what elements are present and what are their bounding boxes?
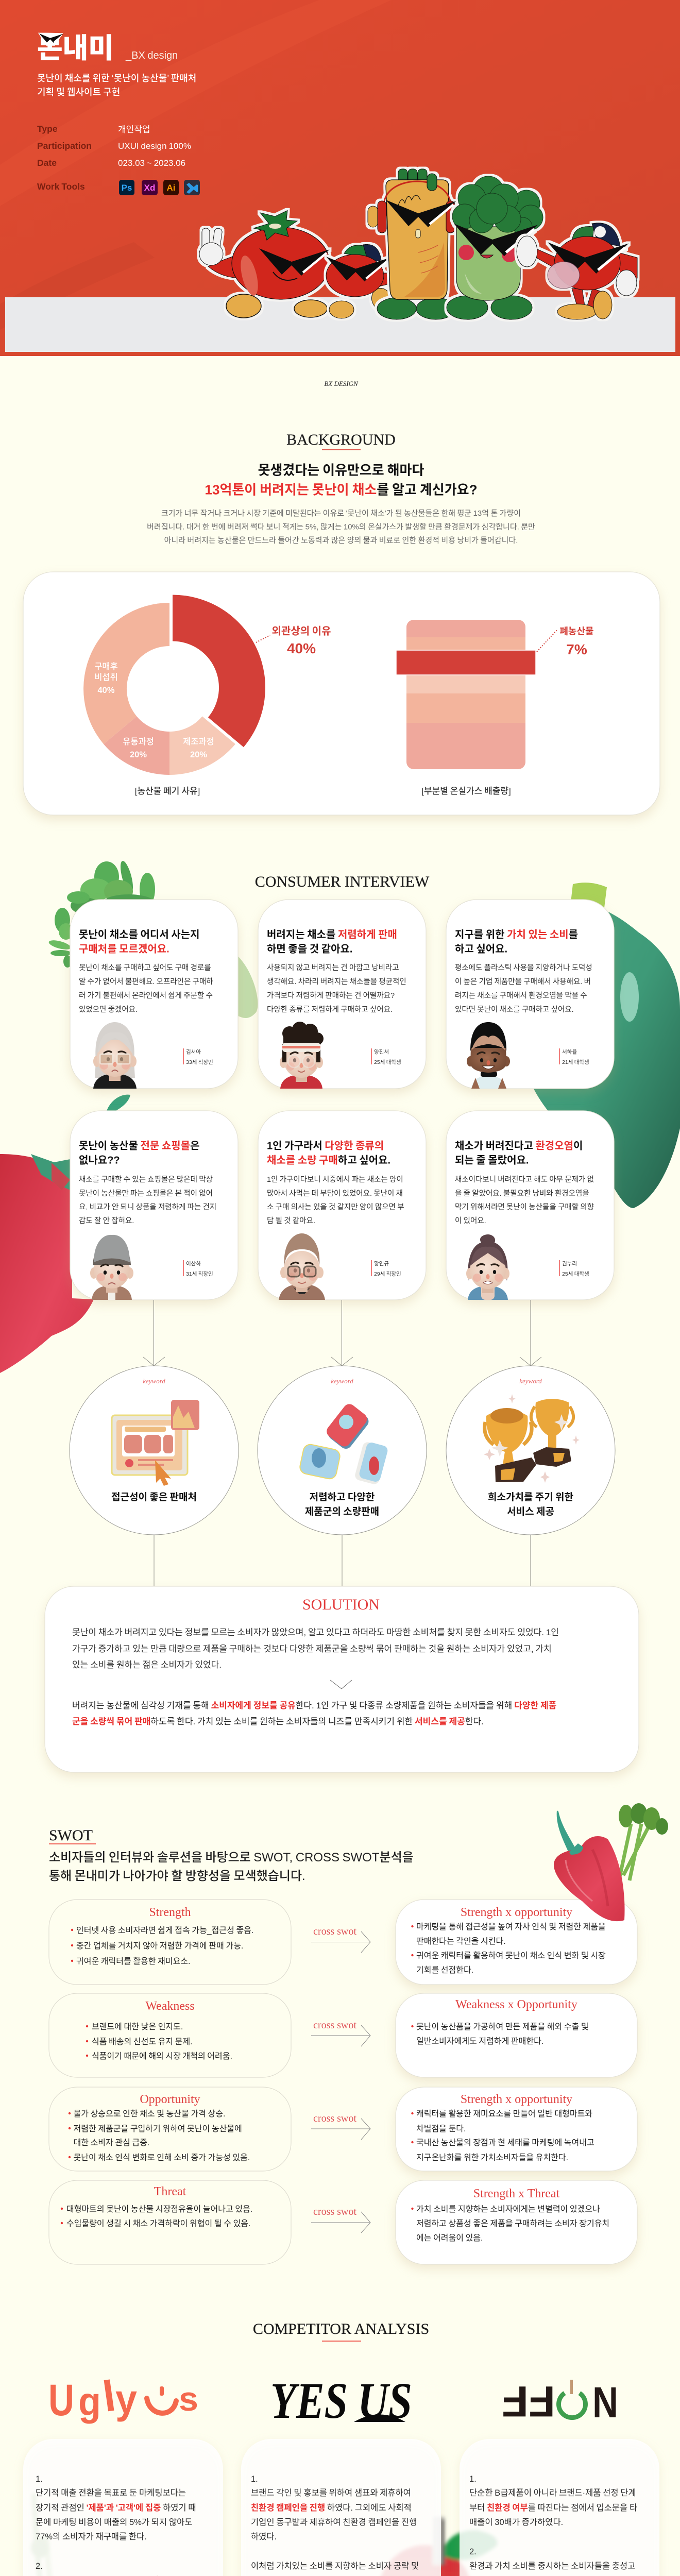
section: competitor analysis: [15, 2320, 665, 2576]
card: interview 4: 이산하: [186, 1260, 201, 1267]
illustration: small tomato mascot: [326, 244, 403, 318]
card: interview 6: 막기 위해서라면 못난이 농산물을 구매할 의향: [455, 1202, 594, 1212]
section: consumer interview: [45, 873, 639, 1772]
card: NOFF analysis: 환경과 가치 소비를 중시하는 소비자들을 충성고: [469, 2561, 635, 2571]
card: YES US analysis: 친환경 캠페인을 진행 하였다. 그외에도 사회적: [251, 2503, 412, 2513]
arrow: cross swot 2: cross swot: [313, 2020, 356, 2031]
row: weakness x opportunity: Weakness x Opportunity: [455, 1998, 577, 2011]
row: strength: Strength: [149, 1906, 191, 1919]
logo: Ugly us: [48, 2371, 198, 2425]
card: Ugly us analysis: 단기적 매출 전환을 목표로 둔 마케팅보다는: [36, 2488, 186, 2498]
avatar: 이산하: [90, 1235, 133, 1300]
chevron: [330, 1680, 352, 1689]
card: interview 5: 황인규: [374, 1261, 389, 1267]
keyword circle: small portions: [258, 1366, 427, 1535]
card: interview 6: 되는 줄 몰랐어요.: [455, 1154, 529, 1166]
card: interview 4: 감도 잘 안 잡혀요.: [79, 1216, 134, 1225]
solution actions: 군을 소량씩 묶어 판매하도록 한다. 가치 있는 소비를 원하는 소비자들의 니즈를 만족시키기 위한 서비스를 제공한다.: [72, 1717, 484, 1726]
card: NOFF analysis: 매출이 30배가 증가하였다.: [469, 2517, 563, 2527]
card: YES US analysis: 하였다.: [251, 2532, 277, 2541]
donut chart: disposal reasons: 20%: [130, 750, 147, 759]
card: interview 2: 사용되지 않고 버려지는 건 아깝고 낭비라고: [267, 963, 399, 972]
row: threat: [49, 2180, 291, 2264]
subtitle: 기획 및 웹사이트 구현: [37, 87, 120, 97]
row: strength x opportunity: 귀여운 캐릭터를 활용하여 못난이 채소 인식 변화 및 시장: [416, 1951, 606, 1960]
row: strength x opportunity 2: 캐릭터를 활용한 재미요소를 만들어 일반 대형마트와: [416, 2109, 592, 2119]
row: strength x opportunity: 마케팅을 통해 접근성을 높여 자사 인식 및 저렴한 제품을: [416, 1922, 606, 1931]
avatar: 김서아: [93, 1022, 137, 1089]
row: strength x opportunity: 기회를 선점한다.: [416, 1965, 473, 1975]
card: interview 4: 없나요??: [79, 1154, 120, 1166]
arrow: cross swot 3: cross swot: [313, 2113, 356, 2124]
row: opportunity: 저렴한 제품군을 구입하기 위하여 못난이 농산물에: [73, 2124, 242, 2133]
row: strength x threat: 에는 어려움이 있음.: [416, 2233, 483, 2243]
card: interview 2: 양진서: [374, 1049, 389, 1055]
card: interview 1: 있었으면 좋겠어요.: [79, 1005, 138, 1014]
card: interview 1: 러 가기 불편해서 온라인에서 쉽게 주문할 수: [79, 991, 213, 1000]
row: strength x threat: Strength x Threat: [473, 2187, 560, 2200]
donut chart: disposal reasons: 비섭취: [94, 672, 118, 682]
logo: 몬내미: 몬내미: [37, 33, 114, 64]
card: interview 1: 33세 직장인: [186, 1059, 213, 1065]
project meta: Participation: [37, 141, 92, 151]
row: opportunity: 물가 상승으로 인한 채소 및 농산물 가격 상승.: [73, 2109, 225, 2119]
donut chart: disposal reasons: 제조과정: [183, 737, 214, 747]
card: interview 5: 1인 가구이다보니 시중에서 파는 채소는 양이: [267, 1175, 403, 1184]
SWOT intro: 통해 몬내미가 나아가야 할 방향성을 모색했습니다.: [49, 1869, 305, 1883]
logo: NOFF: [502, 2377, 618, 2427]
decoration: leaves and vegetables behind interview cards: [0, 860, 680, 1373]
row: strength x opportunity 2: 차별점을 둔다.: [416, 2124, 466, 2133]
project meta: 개인작업: [118, 125, 150, 134]
panel: hero: [0, 0, 680, 356]
solution findings: 있는 소비를 원하는 젊은 소비자가 있었다.: [72, 1660, 222, 1670]
decoration: celery: [618, 1803, 668, 1884]
logo: NOFF: FF: [502, 2377, 555, 2426]
card: interview 6: [446, 1111, 614, 1300]
logo: NOFF: N: [592, 2378, 618, 2427]
project meta: Date: [37, 158, 57, 168]
card: interview 3: 있다면 못난이 채소를 구매하고 싶어요.: [455, 1005, 574, 1014]
row: strength x opportunity 2: [396, 2087, 637, 2171]
row: weakness: 브랜드에 대한 낮은 인지도.: [92, 2022, 183, 2031]
logo: Ugly us: s: [179, 2380, 198, 2418]
logo suffix: _BX design: [125, 50, 178, 61]
card: interview 3: 21세 대학생: [562, 1059, 589, 1065]
icons: work tools: [119, 180, 200, 195]
icons: work tools: Ai: [167, 183, 175, 193]
card: interview 4: 못난이 농산물만 파는 쇼핑몰은 본 적이 없어: [79, 1189, 213, 1198]
card: interview 1: [70, 900, 238, 1089]
keyword circle: consumption value: [446, 1366, 615, 1535]
subtitle: 못난이 채소를 위한 ‘못난이 농산물’ 판매처: [37, 73, 196, 83]
heading: BACKGROUND: BACKGROUND: [286, 431, 396, 448]
illustration: carrot mascot: [368, 169, 464, 319]
illustration: big tomato mascot: [199, 210, 330, 318]
card: interview 1: 못난이 채소를 구매하고 싶어도 구매 경로를: [79, 963, 211, 972]
keyword circle: accessibility: keyword: [143, 1377, 165, 1385]
stacked bar chart: greenhouse gas: [396, 620, 594, 796]
avatar: 양진서: [280, 1022, 324, 1089]
illustration: bubble gum tomato mascot: [517, 223, 637, 319]
headline: 13억톤이 버려지는 못난이 채소를 알고 계신가요?: [205, 482, 477, 498]
row: weakness x opportunity: [396, 1993, 637, 2077]
card: interview 5: 소 구매 의사는 있을 것 같지만 양이 많으면 부: [267, 1202, 404, 1212]
white floor band: [5, 297, 675, 352]
row: weakness: 식품이기 때문에 해외 시장 개척의 어려움.: [92, 2052, 232, 2061]
donut chart: disposal reasons: [농산물 폐기 사유]: [135, 786, 200, 796]
row: threat: Threat: [154, 2185, 186, 2198]
keyword circle: accessibility: [70, 1366, 239, 1535]
card: interview 2: [258, 900, 426, 1089]
keyword circle: consumption value: 서비스 제공: [507, 1506, 554, 1517]
row: strength x threat: 저렴하고 상품성 좋은 제품을 구매하려는 소비자 장기유치: [416, 2219, 609, 2228]
card: interview 2: 25세 대학생: [374, 1059, 401, 1065]
keyword circle: consumption value: 희소가치를 주기 위한: [488, 1492, 573, 1503]
card: NOFF analysis: 단순한 B급제품이 아니라 브랜드·제품 선정 단계: [469, 2488, 636, 2498]
card: interview 6: 이 있어요.: [455, 1216, 486, 1225]
panel: solution: [45, 1586, 639, 1772]
icon: trophies: [484, 1394, 580, 1483]
row: strength: [49, 1900, 291, 1985]
card: NOFF analysis: 2.: [469, 2547, 477, 2556]
stacked bar chart: greenhouse gas: [부분별 온실가스 배출량]: [421, 786, 511, 796]
donut chart: disposal reasons: 40%: [287, 640, 316, 656]
section: background: [23, 431, 660, 815]
row: strength x threat: 가치 소비를 지향하는 소비자에게는 변별력이 있겠으나: [416, 2205, 600, 2214]
card: interview 3: 이 높은 기업 제품만을 구매해서 사용해요. 버: [455, 977, 591, 986]
card: interview 3: 려지는 채소를 구매해서 환경오염을 막을 수: [455, 991, 587, 1000]
card: NOFF analysis: [460, 2439, 659, 2576]
row: strength x opportunity 2: 지구온난화를 위한 가치소비자들을 유치한다.: [416, 2153, 568, 2162]
SWOT intro: 소비자들의 인터뷰와 솔루션을 바탕으로 SWOT, CROSS SWOT분석을: [49, 1851, 414, 1865]
panel: solution: SOLUTION: [302, 1596, 380, 1613]
stacked bar chart: greenhouse gas: 7%: [566, 641, 587, 657]
intro paragraph: 크기가 너무 작거나 크거나 시장 기준에 미달된다는 이유로 '못난이 채소'가 된 농산물들은 한해 평균 13억 톤 가량이: [161, 509, 521, 518]
row: strength: 중간 업체를 거치지 않아 저렴한 가격에 판매 가능.: [76, 1941, 243, 1951]
card: interview 5: 많아서 사먹는 데 부담이 있었어요. 못난이 채: [267, 1189, 403, 1198]
card: interview 6: 25세 대학생: [562, 1271, 589, 1277]
card: interview 6: 권누리: [562, 1261, 577, 1267]
card: interview 1: 김서아: [186, 1049, 201, 1055]
logo: Ugly us: y: [115, 2376, 137, 2422]
card: interview 2: 버려지는 채소를 저렴하게 판매: [267, 929, 397, 941]
arrow: cross swot 2: [311, 2020, 370, 2046]
card: Ugly us analysis: 2.: [36, 2562, 43, 2571]
arrow: cross swot 4: cross swot: [313, 2206, 356, 2217]
card: interview 3: 서하율: [562, 1048, 577, 1055]
row: opportunity: 대한 소비자 관심 급증.: [73, 2138, 149, 2147]
card: interview 5: [258, 1111, 426, 1300]
arrow: cross swot 3: [311, 2113, 370, 2140]
row: threat: 수입물량이 생길 시 채소 가격하락이 위협이 될 수 있음.: [66, 2219, 250, 2228]
heading: SWOT: SWOT: [49, 1827, 93, 1844]
row: strength: 귀여운 캐릭터를 활용한 재미요소.: [76, 1957, 190, 1966]
donut chart: disposal reasons: 구매후: [94, 662, 118, 671]
card: interview 2: 생각해요. 차라리 버려지는 채소들을 평균적인: [267, 977, 406, 986]
card: interview 4: [70, 1111, 238, 1300]
card: YES US analysis: 기업인 동구밭과 제휴하여 친환경 캠페인을 진행: [251, 2517, 417, 2527]
card: interview 3: 평소에도 플라스틱 사용을 지양하거나 도덕성: [455, 963, 592, 972]
icon: web shop window: [112, 1400, 199, 1486]
project meta: 023.03 ~ 2023.06: [118, 158, 185, 168]
illustration: cabbage mascot: [447, 176, 543, 319]
label: BX DESIGN: BX DESIGN: [324, 380, 359, 387]
card: interview 3: 하고 싶어요.: [455, 943, 507, 955]
section: SWOT: [49, 1803, 668, 2264]
arrow: cross swot 4: [311, 2206, 370, 2233]
donut chart: disposal reasons: 유통과정: [123, 737, 154, 747]
icon: product tiles: [299, 1401, 389, 1485]
card: interview 6: 채소이다보니 버려진다고 해도 아무 문제가 없: [455, 1175, 594, 1184]
logo: YES US: [270, 2372, 412, 2429]
row: strength x opportunity: [396, 1900, 637, 1985]
keyword circle: small portions: 저렴하고 다양한: [310, 1492, 375, 1503]
card: YES US analysis: 1.: [251, 2475, 258, 2484]
row: opportunity: 못난이 채소 인식 변화로 인해 소비 증가 가능성 있음.: [73, 2153, 250, 2162]
card: interview 6: 을 줄 알았어요. 불필요한 낭비와 환경오염을: [455, 1189, 589, 1198]
project meta: UXUI design 100%: [118, 141, 191, 151]
card: YES US analysis: 브랜드 각인 및 홍보를 위하여 샘표와 제휴하여: [251, 2488, 411, 2498]
arrows: interviews to keywords: [143, 1300, 541, 1366]
logo: Ugly us: l: [100, 2371, 118, 2421]
heading: consumer interview: CONSUMER INTERVIEW: [255, 873, 430, 890]
card: Ugly us analysis: 장기적 관점인 '제품'과 '고객'에 집중 하였기 때: [36, 2503, 196, 2513]
card: interview 4: 요. 비교가 안 되니 상품을 저렴하게 파는 건지: [79, 1202, 216, 1212]
avatar: 권누리: [466, 1234, 509, 1300]
logo: YES US: US: [358, 2372, 412, 2429]
card: interview 4: 채소를 구매할 수 있는 쇼핑몰은 많은데 막상: [79, 1175, 213, 1184]
row: strength x opportunity 2: Strength x opportunity: [461, 2093, 572, 2106]
card: Ugly us analysis: [23, 2439, 223, 2576]
solution actions: 버려지는 농산물에 심각성 기재를 통해 소비자에게 정보를 공유한다. 1인 가구 및 다종류 소량제품을 원하는 소비자들을 위해 다양한 제품: [72, 1701, 556, 1710]
row: strength x opportunity: Strength x opportunity: [461, 1906, 572, 1919]
card: interview 5: 채소를 소량 구매하고 싶어요.: [267, 1155, 390, 1166]
stacked bar chart: greenhouse gas: 폐농산물: [559, 626, 594, 637]
card: interview 1: 구매처를 모르겠어요.: [79, 943, 169, 955]
headline: 못생겼다는 이유만으로 해마다: [258, 463, 424, 478]
keyword circle: small portions: keyword: [331, 1377, 353, 1385]
row: weakness: Weakness: [145, 1999, 195, 2013]
solution findings: 가구가 증가하고 있는 만큼 대량으로 제품을 구매하는 것보다 다양한 제품군을 소량씩 묶어 판매하는 것을 원하는 소비자가 있었고, 가치: [72, 1644, 552, 1654]
avatar: 서하율: [467, 1022, 510, 1089]
card: Ugly us analysis: 문에 마케팅 비용이 매출의 5%가 되지 않아도: [36, 2517, 192, 2527]
arrow: cross swot 1: cross swot: [313, 1926, 356, 1937]
row: weakness: [49, 1993, 291, 2077]
card: YES US analysis: 이처럼 가치있는 소비를 지향하는 소비자 공략 및: [251, 2561, 419, 2571]
intro paragraph: 아니라 버려지는 농산물은 만드느라 들어간 노동력과 많은 양의 물과 비료로 인한 환경적 비용 낭비가 들어갑니다.: [164, 536, 518, 545]
keyword circle: consumption value: keyword: [519, 1377, 542, 1385]
project meta: Work Tools: [37, 181, 85, 192]
row: strength x threat: [396, 2180, 637, 2264]
icons: work tools: Xd: [144, 183, 155, 193]
row: strength x opportunity 2: 국내산 농산물의 장점과 현 세태를 마케팅에 녹여내고: [416, 2138, 594, 2147]
donut chart: disposal reasons: 외관상의 이유: [272, 625, 331, 637]
row: opportunity: [49, 2087, 291, 2171]
donut chart: disposal reasons: [83, 595, 331, 796]
card: Ugly us analysis: 1.: [36, 2475, 43, 2484]
card: interview 1: 알 수가 없어서 불편해요. 오프라인은 구매하: [79, 977, 213, 986]
card: interview 1: 못난이 채소를 어디서 사는지: [79, 928, 199, 941]
row: opportunity: Opportunity: [140, 2093, 200, 2106]
row: weakness x opportunity: 못난이 농산품을 가공하여 만든 제품을 해외 수출 및: [416, 2022, 589, 2031]
card: NOFF analysis: 부터 친환경 여부를 따진다는 점에서 입소문을 타: [469, 2503, 637, 2513]
card: interview 2: 다양한 종류를 저렴하게 구매하고 싶어요.: [267, 1005, 393, 1014]
row: weakness x opportunity: 일반소비자에게도 저렴하게 판매한다.: [416, 2037, 543, 2046]
heading: competitor analysis: COMPETITOR ANALYSIS: [253, 2320, 429, 2337]
row: weakness: 식품 배송의 신선도 유지 문제.: [92, 2037, 193, 2046]
card: interview 4: 못난이 농산물 전문 쇼핑몰은: [79, 1141, 199, 1152]
card: interview 5: 1인 가구라서 다양한 종류의: [267, 1141, 384, 1152]
card: interview 3: [446, 900, 614, 1089]
logo: Ugly us: U: [48, 2376, 74, 2425]
keyword circle: small portions: 제품군의 소량판매: [305, 1506, 379, 1517]
card: interview 5: 담 될 것 같아요.: [267, 1216, 315, 1225]
row: strength: 인터넷 사용 소비자라면 쉽게 접속 가능_접근성 좋음.: [76, 1926, 253, 1935]
card: NOFF analysis: 1.: [469, 2475, 477, 2484]
panel: charts: [23, 572, 660, 815]
arrow: cross swot 1: [311, 1926, 370, 1953]
card: Ugly us analysis: 77%의 소비자가 재구매를 한다.: [36, 2532, 147, 2541]
card: YES US analysis: [241, 2439, 441, 2576]
connectors: keywords to solution: [154, 1535, 531, 1586]
card: interview 5: 29세 직장인: [374, 1271, 401, 1277]
logo: YES US: YES: [270, 2372, 348, 2429]
keyword circle: accessibility: 접근성이 좋은 판매처: [111, 1492, 197, 1503]
card: interview 2: 하면 좋을 것 같아요.: [267, 943, 352, 955]
avatar: 황인규: [279, 1233, 325, 1300]
solution findings: 못난이 채소가 버려지고 있다는 정보를 모르는 소비자가 많았으며, 알고 있다고 하더라도 마땅한 소비처를 찾지 못한 소비자도 있었다. 1인: [72, 1628, 559, 1637]
card: interview 6: 채소가 버려진다고 환경오염이: [455, 1141, 583, 1152]
decoration: blurred vegetables: [15, 2494, 665, 2576]
donut chart: disposal reasons: 20%: [190, 750, 207, 759]
project meta: [37, 124, 191, 192]
row: strength x opportunity: 판매한다는 각인을 시킨다.: [416, 1937, 506, 1946]
project meta: Type: [37, 124, 58, 134]
row: threat: 대형마트의 못난이 농산물 시장점유율이 늘어나고 있음.: [66, 2205, 252, 2214]
icons: work tools: Ps: [122, 183, 132, 193]
card: interview 2: 가격보다 저렴하게 판매하는 건 어떨까요?: [267, 991, 395, 1000]
intro paragraph: 버려집니다. 대거 한 번에 버려져 썩다 보니 적게는 5%, 많게는 10%의 온실가스가 발생할 만큼 환경문제가 심각합니다. 뿐만: [147, 522, 535, 532]
donut chart: disposal reasons: 40%: [97, 686, 115, 695]
card: interview 4: 31세 직장인: [186, 1271, 213, 1277]
decoration: red pepper: [554, 1810, 625, 1921]
card: interview 3: 지구를 위한 가치 있는 소비를: [455, 929, 578, 941]
logo: Ugly us: g: [78, 2379, 101, 2424]
